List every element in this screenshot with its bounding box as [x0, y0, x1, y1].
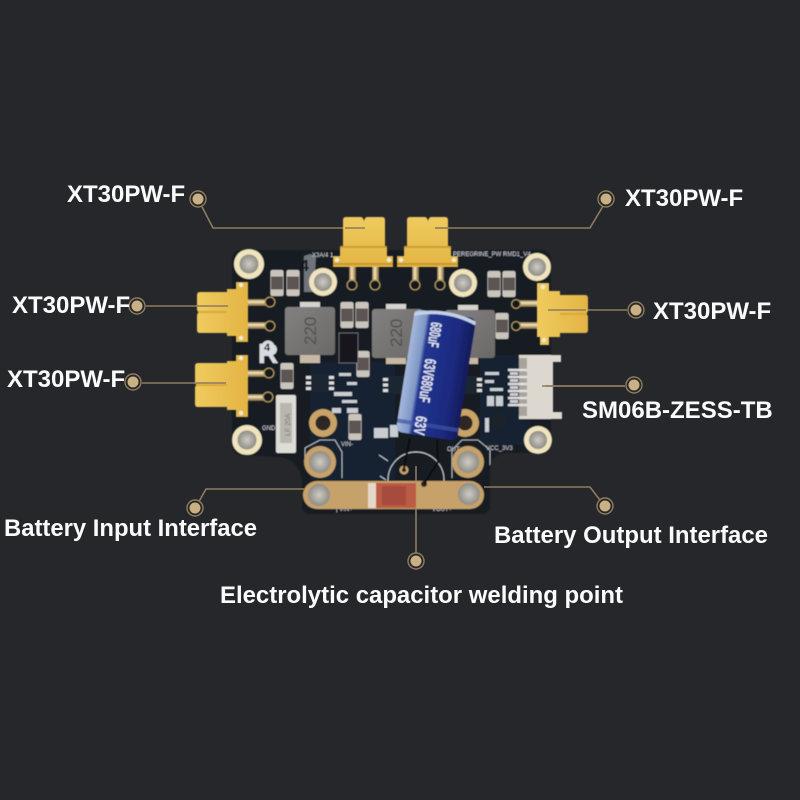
board silk text: VIN- [341, 442, 353, 448]
small SMD parts [332, 372, 518, 438]
electrolytic capacitor: 63V680uF [415, 358, 438, 404]
label: capacitor welding point: Electrolytic capacitor welding point [220, 582, 623, 609]
logo marks [258, 254, 316, 369]
board outline [232, 250, 551, 514]
inductors [285, 302, 495, 364]
fuse [276, 395, 296, 453]
blue circuit zone [310, 355, 530, 480]
electrolytic capacitor [396, 307, 477, 441]
board silk text: VOUT+ [432, 507, 453, 513]
board silk text: GND [262, 426, 276, 432]
label: right connector: XT30PW-F [653, 298, 771, 325]
inductors: 220 [301, 317, 320, 345]
label: left lower connector: XT30PW-F [7, 366, 125, 393]
silkscreen hexagon pads [305, 440, 490, 478]
fuse: LF 20A [285, 413, 292, 436]
label: top left connector: XT30PW-F [67, 181, 185, 208]
electrolytic capacitor: 63V [409, 415, 429, 436]
connector: left upper XT30 [197, 282, 275, 342]
board silk text: OUT- [447, 447, 461, 453]
logo marks: 4 [264, 342, 271, 354]
circuit board [232, 249, 562, 514]
callout dots [125, 191, 644, 569]
label: top right connector: XT30PW-F [625, 185, 743, 212]
white JST connector [508, 355, 562, 419]
logo marks: 4 [300, 258, 309, 275]
board silk text: | VIN+ [336, 507, 353, 513]
capacitor leads [404, 438, 438, 484]
label: left upper connector: XT30PW-F [12, 292, 130, 319]
board silk text: PEREGRINE_PW RMD1_V4 [453, 252, 531, 258]
electrolytic capacitor: 680uF [423, 321, 444, 348]
board silk text: X3A/4 1 [312, 253, 334, 259]
black diode [339, 333, 358, 363]
label: battery input: Battery Input Interface [4, 515, 257, 542]
connector: right XT30 [512, 283, 588, 345]
IC chips [306, 374, 509, 432]
logo marks: R [258, 338, 278, 369]
copper bus bar [303, 466, 484, 509]
inductors: 220 [387, 319, 406, 347]
capacitor solder circle [379, 452, 444, 508]
board silk text: VCC_3V3 [486, 446, 513, 452]
connector lines over plugs [195, 228, 625, 386]
connector: top right XT30 [397, 217, 458, 290]
leader lines [142, 201, 627, 553]
label: JST connector: SM06B-ZESS-TB [582, 397, 773, 424]
mounting holes [232, 249, 552, 478]
ceramic capacitors [270, 270, 516, 440]
connector: left lower XT30 [195, 355, 274, 417]
connector: top left XT30 [333, 217, 393, 290]
board silk text [262, 252, 531, 513]
label: battery output: Battery Output Interface [494, 522, 768, 549]
